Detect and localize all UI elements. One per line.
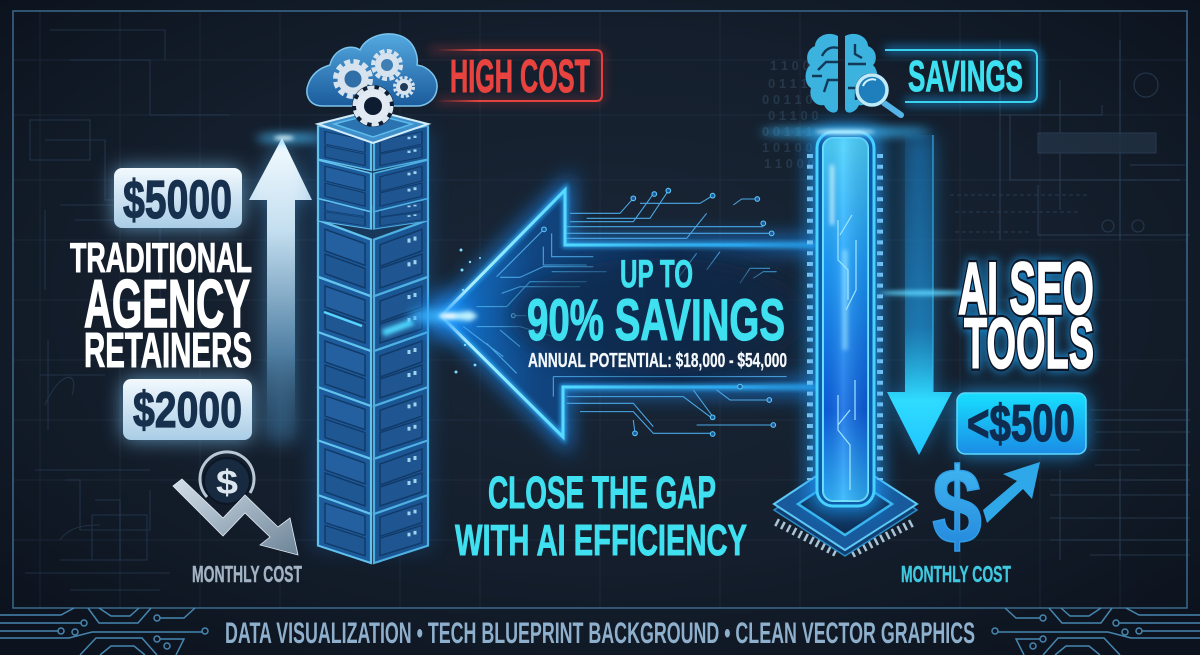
icon: coin with falling arrow: $	[216, 464, 238, 502]
icon: cloud with gears	[307, 34, 437, 127]
sparkles near tip	[454, 248, 481, 374]
glowing pillar	[760, 126, 930, 512]
heading: ai seo tools: TOOLS	[964, 305, 1094, 384]
highlight on tower from arrow	[324, 312, 413, 333]
down arrow	[880, 135, 970, 455]
high cost tag	[430, 50, 602, 102]
tagline	[455, 467, 747, 565]
savings tag: SAVINGS	[908, 52, 1023, 101]
arrow body	[441, 190, 815, 437]
icon: coin with falling arrow	[173, 452, 298, 555]
binary digits: 0 0 1 1 1	[762, 124, 813, 139]
blueprint drawing: left	[25, 30, 230, 590]
blueprint drawing: upper right	[950, 40, 1190, 240]
footer circuit: left	[0, 608, 208, 655]
footer circuit: right	[992, 608, 1200, 655]
text: 90% savings: 90% SAVINGS	[527, 288, 785, 353]
icon: brain with magnifier	[806, 34, 901, 115]
left column	[70, 134, 324, 587]
high cost tag: HIGH COST	[450, 50, 590, 102]
price badge: $2000: $2000	[133, 382, 242, 438]
text: up to: UP TO	[620, 253, 693, 296]
blueprint table: lower right	[1050, 410, 1190, 560]
icon: dollar with rising arrow: $	[932, 445, 982, 566]
binary digits: 0 0 1 1 0	[762, 92, 813, 107]
tagline: WITH AI EFFICIENCY	[455, 516, 747, 565]
heading: ai seo tools: TOOLS	[964, 305, 1094, 384]
label: monthly cost: MONTHLY COST	[192, 561, 302, 587]
binary digits: 1 1 0 0 1	[770, 58, 821, 73]
savings tag	[885, 50, 1037, 102]
tagline: CLOSE THE GAP	[488, 467, 716, 518]
binary digits	[762, 58, 821, 171]
dark panel behind text	[510, 258, 810, 374]
tower glow	[312, 130, 432, 550]
heading: ai seo tools: TOOLS	[964, 305, 1094, 384]
tower top plate	[318, 110, 428, 143]
central savings arrow	[408, 188, 815, 437]
price badge: $5000: $5000	[123, 170, 232, 230]
binary digits: 1 1 0 0 0	[764, 156, 815, 171]
label: monthly cost: MONTHLY COST	[901, 561, 1011, 587]
binary digits: 1 0 1 0 0	[762, 140, 813, 155]
heading: traditional agency retainers: TRADITIONAL	[70, 234, 252, 281]
heading: traditional agency retainers: RETAINERS	[84, 324, 252, 378]
binary digits: 0 1 1 1 0	[768, 76, 819, 91]
pillar pins	[810, 154, 880, 480]
icon: dollar with rising arrow	[932, 445, 1040, 566]
heading: ai seo tools	[958, 247, 1094, 384]
heading: traditional agency retainers	[70, 234, 252, 378]
price badge: <$500: <$500	[967, 395, 1075, 453]
binary digits: 0 1 1 0 0	[768, 108, 819, 123]
chip base	[774, 457, 917, 556]
server blocks	[318, 126, 428, 563]
arrow tip flare	[408, 292, 478, 340]
circuit traces	[463, 188, 787, 436]
heading: traditional agency retainers: AGENCY	[84, 266, 250, 342]
text: annual potential: ANNUAL POTENTIAL: $18,000 - $54,000	[528, 350, 787, 372]
server tower	[312, 110, 432, 563]
right column	[760, 34, 1094, 587]
up arrow	[249, 134, 324, 440]
